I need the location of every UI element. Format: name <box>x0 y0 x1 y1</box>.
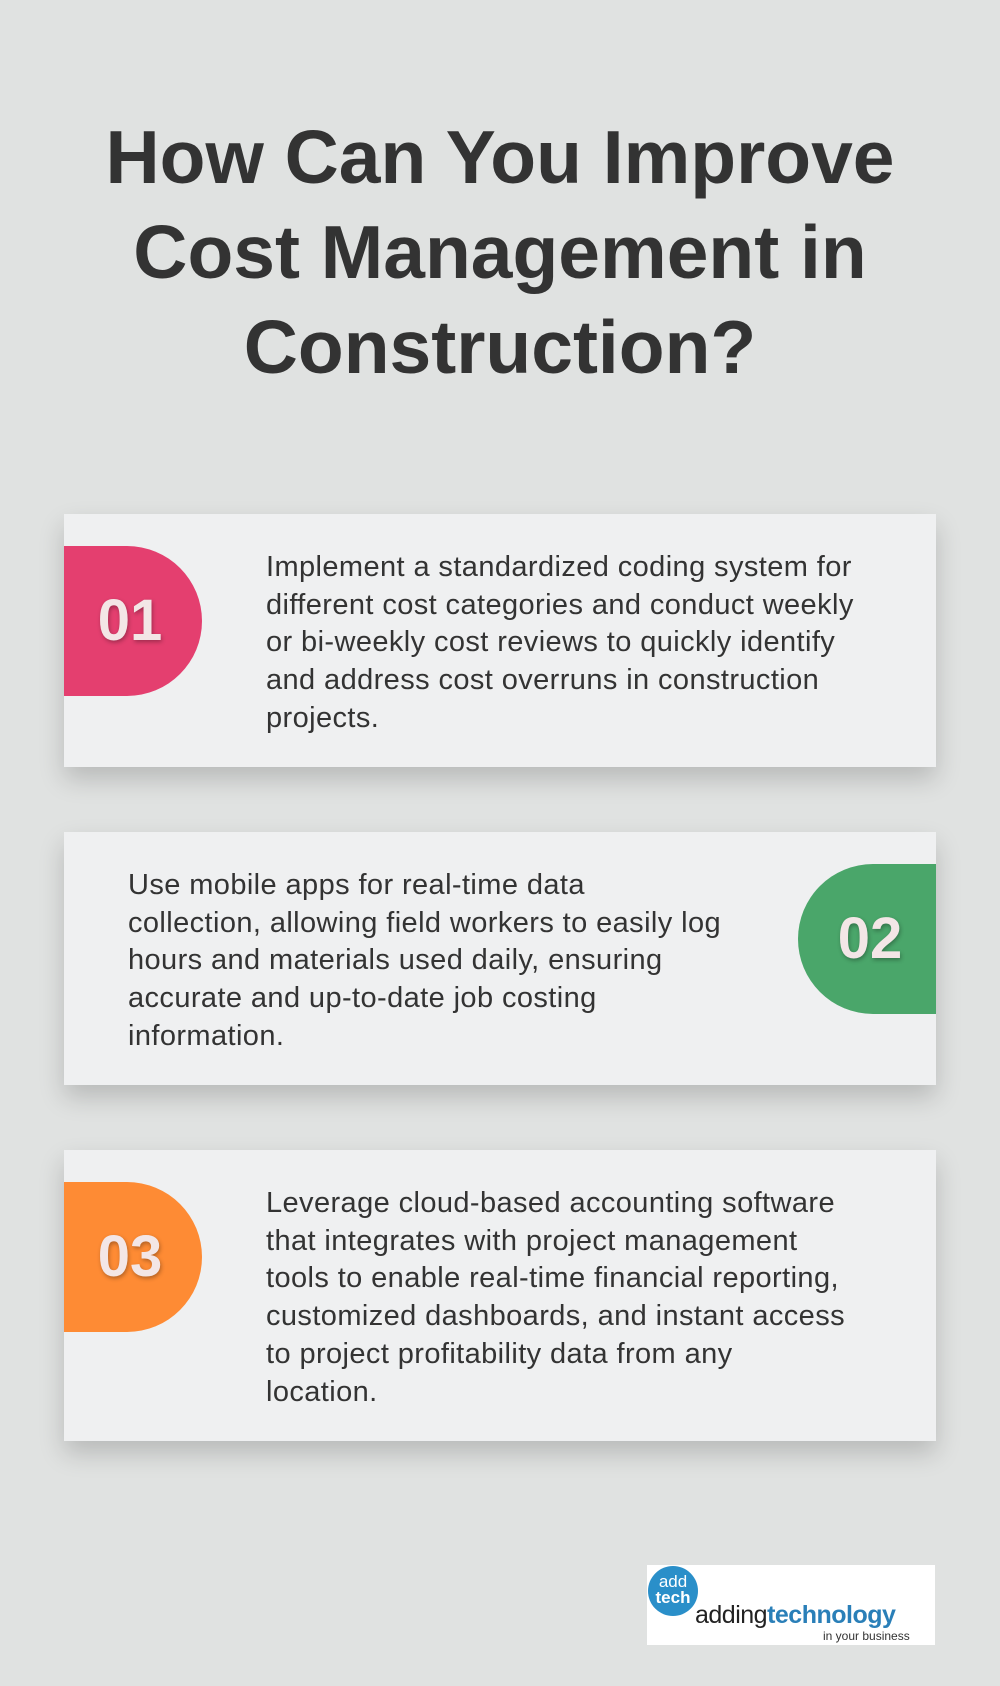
title: How Can You Improve <box>105 115 894 199</box>
panel: step 3 <box>64 1150 936 1441</box>
badge 03 <box>64 1182 202 1332</box>
logo icon: add <box>659 1572 687 1591</box>
logo icon <box>648 1566 698 1616</box>
panel: step 2 <box>64 832 936 1085</box>
text 3: that integrates with project management <box>266 1225 797 1257</box>
logo <box>647 1565 935 1645</box>
title <box>105 115 894 389</box>
badge 02: 02 <box>838 906 902 971</box>
text 1: projects. <box>266 702 379 734</box>
logo text: addingtechnology <box>695 1601 895 1629</box>
text 3: location. <box>266 1376 378 1408</box>
title: Construction? <box>244 305 756 389</box>
text 3: customized dashboards, and instant access <box>266 1300 845 1332</box>
badge 03: 03 <box>98 1224 162 1289</box>
badge 01: 01 <box>98 588 162 653</box>
text 1 <box>266 551 854 734</box>
text 1: different cost categories and conduct weekly <box>266 589 854 621</box>
text 3: tools to enable real-time financial reporting, <box>266 1262 839 1294</box>
logo: in your business <box>823 1629 910 1643</box>
text 3: Leverage cloud-based accounting software <box>266 1187 835 1219</box>
text 2 <box>128 869 721 1052</box>
title: Cost Management in <box>133 210 867 294</box>
text 1: Implement a standardized coding system for <box>266 551 852 583</box>
text 3: to project profitability data from any <box>266 1338 733 1370</box>
text 2: information. <box>128 1020 284 1052</box>
text 2: Use mobile apps for real-time data <box>128 869 585 901</box>
text 1: and address cost overruns in construction <box>266 664 819 696</box>
logo icon: tech <box>656 1588 690 1607</box>
text 2: accurate and up-to-date job costing <box>128 982 597 1014</box>
text 2: hours and materials used daily, ensuring <box>128 944 663 976</box>
text 3 <box>266 1187 845 1408</box>
badge 01 <box>64 546 202 696</box>
text 1: or bi-weekly cost reviews to quickly identify <box>266 626 835 658</box>
text 2: collection, allowing field workers to easily log <box>128 907 721 939</box>
badge 02 <box>798 864 936 1014</box>
panel: step 1 <box>64 514 936 767</box>
